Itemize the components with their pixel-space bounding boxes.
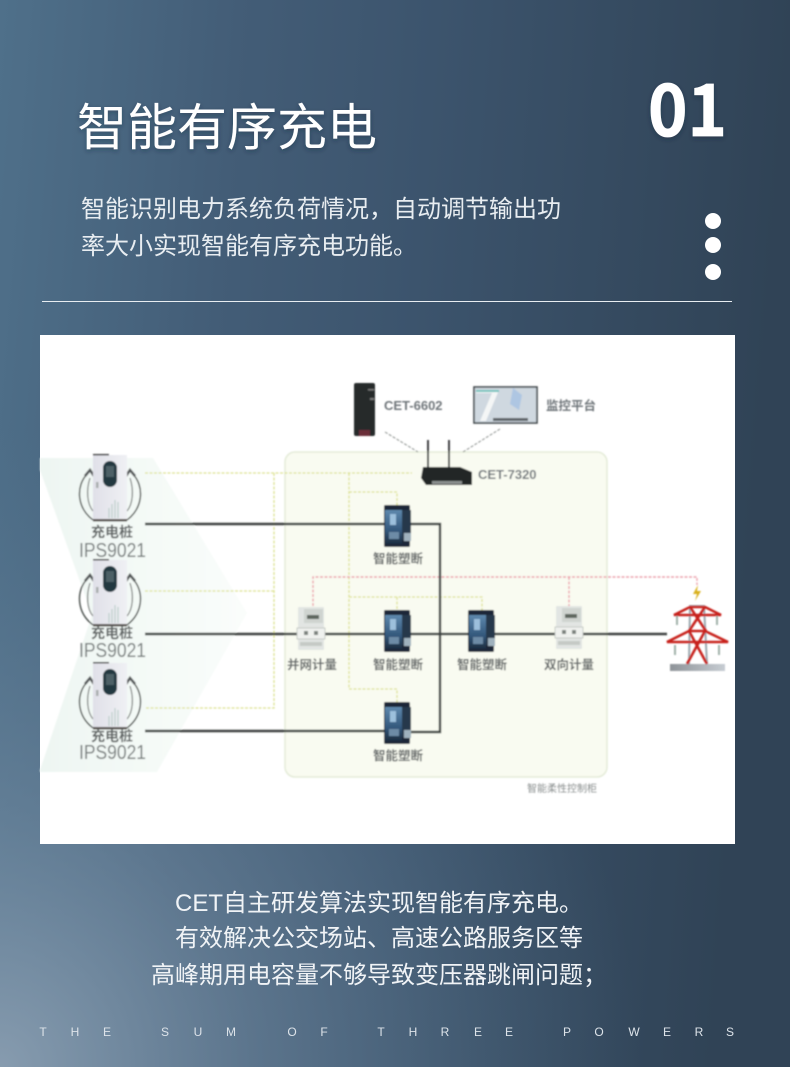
summary text: CET自主研发算法实现智能有序充电。: [175, 890, 583, 917]
summary text: 有效解决公交场站、高速公路服务区等: [175, 925, 583, 952]
component labels: 智能塑断: [373, 748, 423, 763]
gateway CET-7320: CET-7320: [478, 467, 537, 482]
section number: 01: [648, 56, 727, 157]
divider: [42, 301, 732, 302]
charging piles: [79, 454, 141, 730]
meters: [297, 606, 583, 650]
dashed signal lines: red: [313, 577, 697, 606]
gateway CET-7320: [421, 440, 537, 485]
dashed signal lines: green: [145, 473, 482, 708]
charging pile labels: IPS9021: [79, 540, 146, 562]
charging pile labels: [79, 524, 146, 764]
component labels: [287, 551, 594, 763]
component labels: 智能塑断: [373, 551, 423, 566]
dashed network links: [385, 429, 500, 452]
description text: 率大小实现智能有序充电功能。: [81, 233, 417, 260]
component labels: 智能塑断: [373, 657, 423, 672]
description text: 智能识别电力系统负荷情况，自动调节输出功: [81, 196, 561, 223]
component labels: 智能塑断: [457, 657, 507, 672]
charging pile labels: IPS9021: [79, 640, 146, 662]
panel: system diagram: [40, 335, 735, 844]
monitoring platform: [474, 387, 596, 423]
summary text: [151, 890, 607, 989]
icon: lightning bolt: [693, 585, 701, 601]
description text: [81, 196, 561, 260]
charging pile labels: 充电桩: [91, 524, 133, 540]
icon: transmission tower: [667, 606, 728, 671]
smart breakers: [384, 505, 495, 744]
server CET-6602: CET-6602: [384, 398, 443, 413]
power lines: [145, 524, 667, 732]
summary text: 高峰期用电容量不够导致变压器跳闸问题；: [151, 962, 607, 989]
component labels: 双向计量: [544, 657, 594, 672]
cabinet caption: 智能柔性控制柜: [527, 782, 597, 795]
charging pile labels: IPS9021: [79, 742, 146, 764]
icon: three dots: [705, 213, 721, 280]
charging pile labels: 充电桩: [91, 728, 133, 744]
control cabinet box: [285, 452, 607, 777]
background chevron: [40, 458, 247, 772]
title: 智能有序充电: [77, 100, 377, 156]
charging pile labels: 充电桩: [91, 625, 133, 641]
footer caption: THE SUM OF THREE POWERS: [39, 1025, 734, 1039]
component labels: 并网计量: [287, 657, 337, 672]
monitoring platform: 监控平台: [546, 398, 596, 413]
server CET-6602: [354, 383, 443, 436]
